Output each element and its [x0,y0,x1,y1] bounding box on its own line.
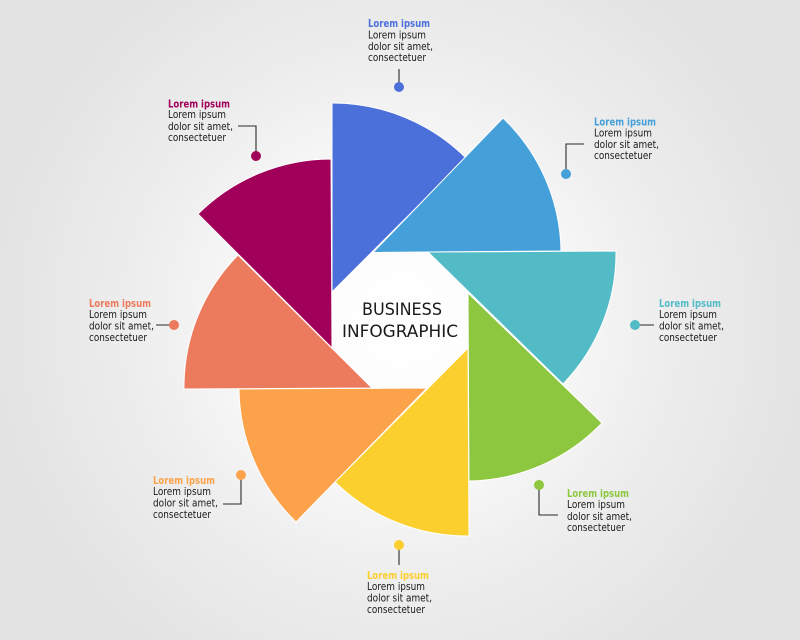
callout: purple [168,98,261,161]
callout text [89,298,154,344]
callout text: Lorem ipsum [659,298,721,310]
leader and dot [223,470,246,504]
callout text: Lorem ipsum [594,116,656,128]
callout: orange [153,470,246,521]
wedge: yellow [335,348,469,536]
callout text: Lorem ipsum [168,109,226,121]
callout text: Lorem ipsum [153,475,215,487]
wedge: orange [239,388,427,522]
callout text: dolor sit amet, [168,121,233,133]
callout: coral [89,298,179,344]
leader and dot [394,540,404,565]
wedge: teal [428,251,616,384]
callout text: Lorem ipsum [567,499,625,511]
callout text: consectetuer [89,332,148,344]
callout text: Lorem ipsum [594,128,652,140]
wedge: coral [184,255,372,389]
callout text: dolor sit amet, [367,592,432,604]
leader and dot [534,480,558,515]
title line 1: BUSINESS [362,300,442,320]
callout text: consectetuer [567,522,626,534]
callout text: Lorem ipsum [368,18,430,30]
center title [342,300,458,342]
callout text: consectetuer [368,52,427,64]
callout: teal [630,298,724,344]
leader and dot [561,144,584,179]
callout text: Lorem ipsum [153,486,211,498]
callout text: dolor sit amet, [368,41,433,53]
callout text [153,475,218,521]
callout text [168,98,233,144]
callout text [567,488,632,534]
leader and dot [156,320,179,330]
callout text: Lorem ipsum [367,581,425,593]
callout text: Lorem ipsum [168,98,230,110]
callout text: Lorem ipsum [89,309,147,321]
callout text: dolor sit amet, [89,320,154,332]
callout text: consectetuer [153,509,212,521]
leader and dot [630,320,654,330]
callout: blue [368,18,433,92]
callout text: consectetuer [367,604,426,616]
callout: yellow [367,540,432,616]
callout text [659,298,724,344]
callout text: Lorem ipsum [659,309,717,321]
callout text: consectetuer [594,150,653,162]
callout text: dolor sit amet, [659,320,724,332]
wedge: blue [332,103,466,292]
callout text [594,116,659,162]
title line 2: INFOGRAPHIC [342,322,458,342]
callout text: Lorem ipsum [367,570,429,582]
wedge: light blue [373,118,561,252]
callout text: Lorem ipsum [89,298,151,310]
leader and dot [394,69,404,92]
callout text: consectetuer [659,332,718,344]
callout text: dolor sit amet, [594,139,659,151]
leader and dot [238,126,261,161]
callout text: dolor sit amet, [153,498,218,510]
wedge: purple [198,159,332,348]
pinwheel chart [184,103,616,536]
wedge: green [468,293,602,481]
callout: light blue [561,116,659,179]
callout text: Lorem ipsum [368,30,426,42]
callout text: Lorem ipsum [567,488,629,500]
callout: green [534,480,632,534]
callout text [368,18,433,64]
callout text: dolor sit amet, [567,511,632,523]
callout text: consectetuer [168,132,227,144]
callout text [367,570,432,616]
